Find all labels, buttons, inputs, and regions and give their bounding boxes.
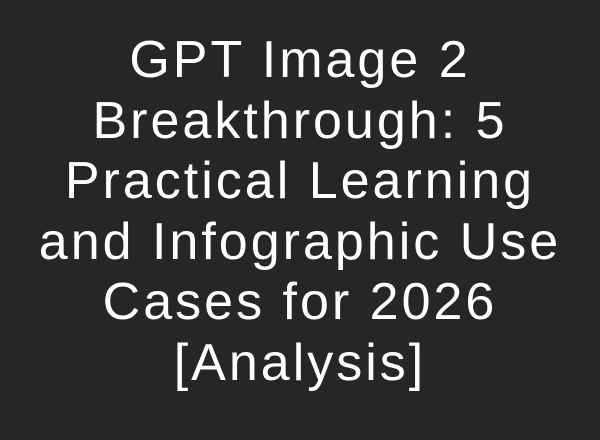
title: Breakthrough: 5 [92,92,508,150]
title: Practical Learning [65,152,535,210]
title: and Infographic Use [39,212,561,270]
title: GPT Image 2 [129,31,471,89]
title: [Analysis] [174,334,426,392]
title: Cases for 2026 [103,273,497,331]
